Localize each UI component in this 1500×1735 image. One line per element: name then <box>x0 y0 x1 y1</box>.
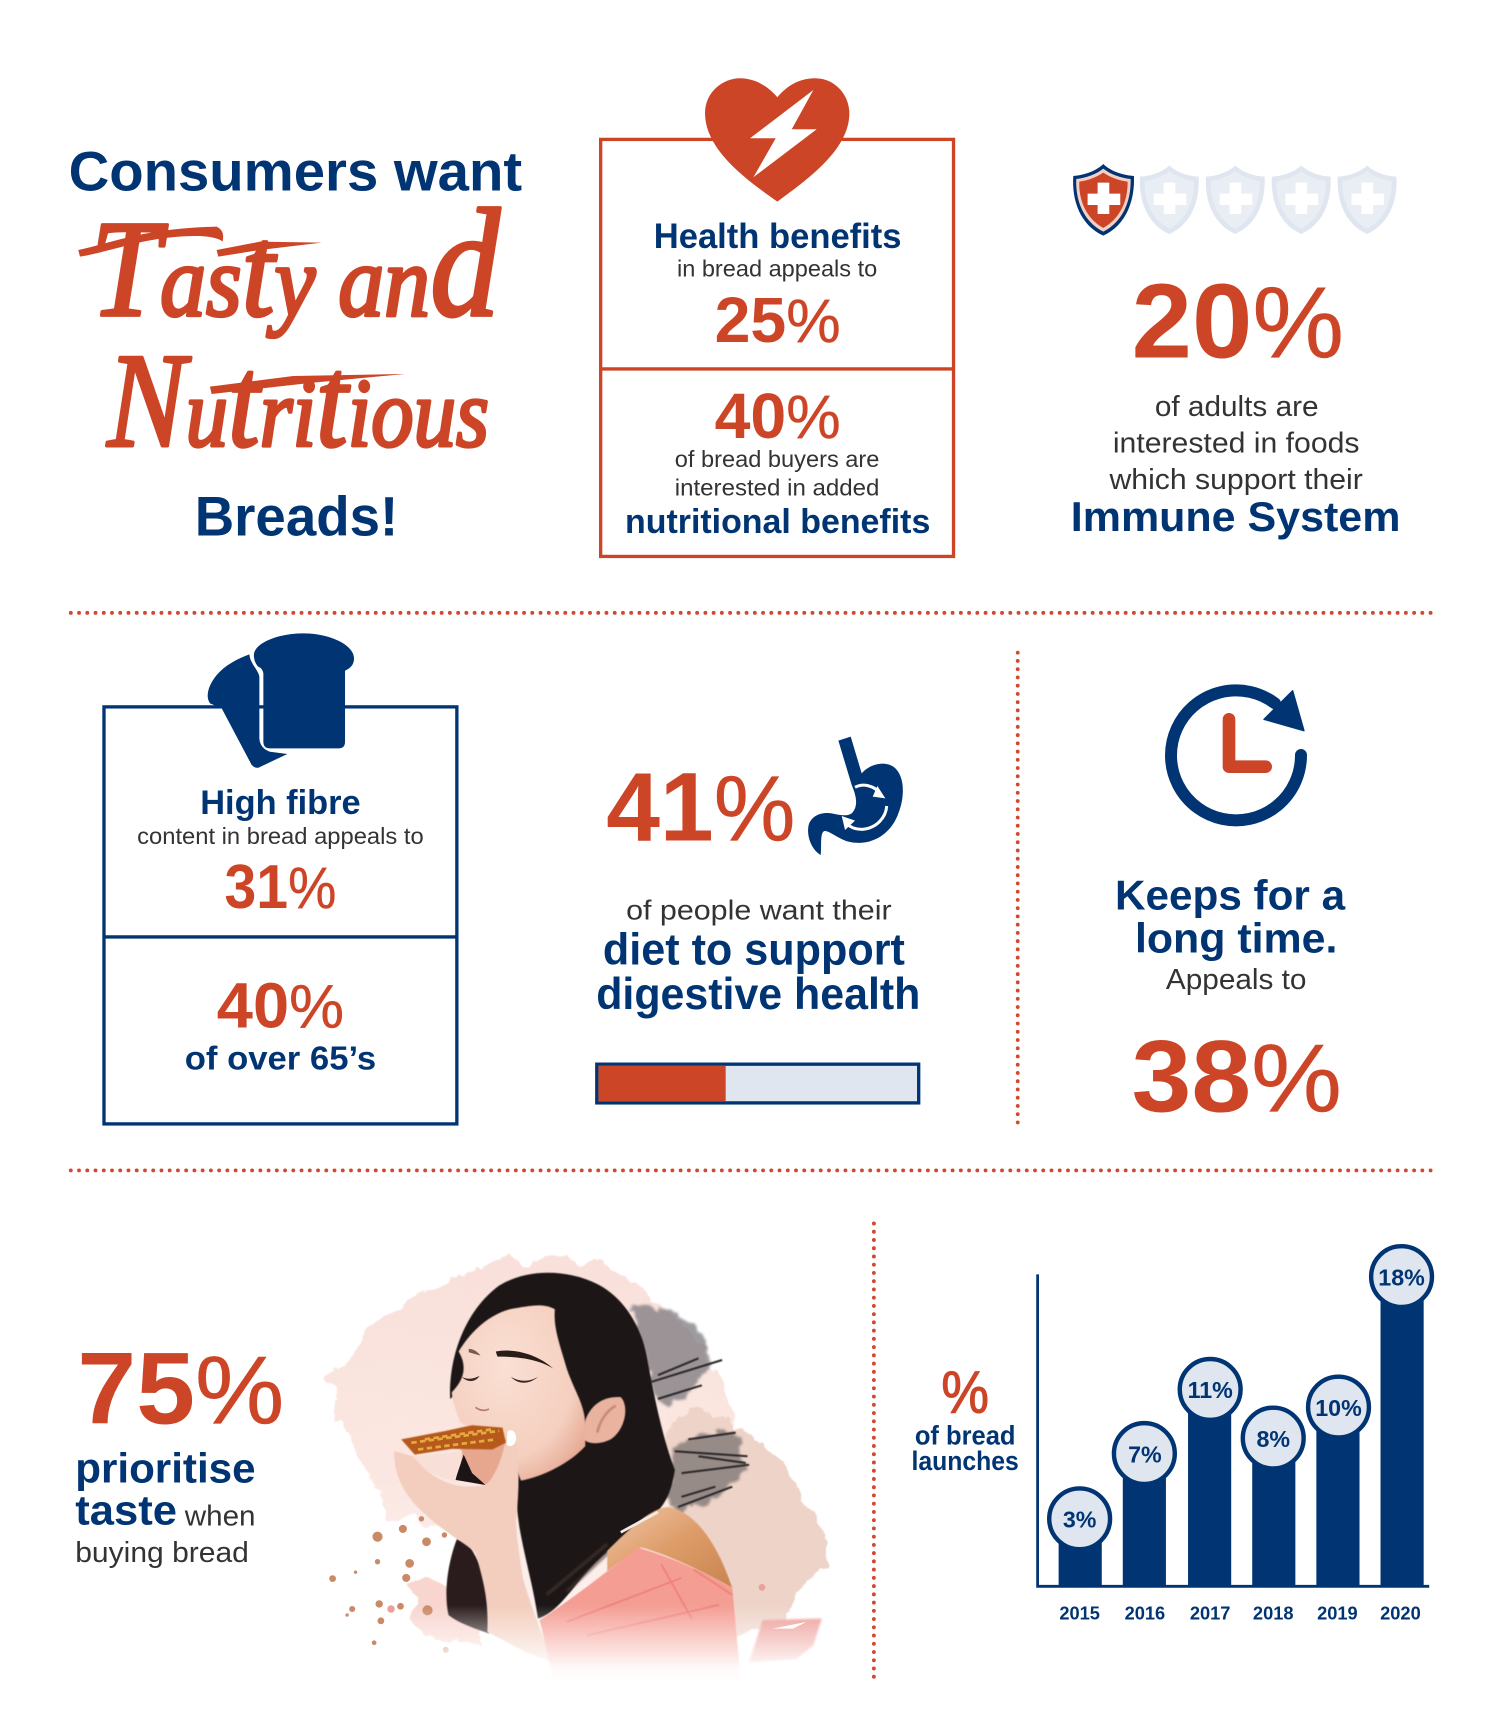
script heading: tasty and: Tasty and <box>91 178 501 349</box>
text: of over 65s: of over 65’s <box>185 1041 376 1078</box>
stat: 40% over 65: 40% <box>217 970 344 1042</box>
stat: 75%: 75% <box>77 1332 284 1446</box>
stat: 41%: 41% <box>606 753 795 862</box>
text: diet to support: diet to support <box>603 926 905 975</box>
text: interested in added: interested in added <box>675 475 879 501</box>
value labels: 7% <box>1128 1441 1162 1467</box>
script heading: nutritious: Nutritious <box>106 327 489 476</box>
value labels: 8% <box>1256 1426 1290 1452</box>
icon: stomach <box>808 737 903 855</box>
icon: clock <box>1171 690 1304 820</box>
icon row: shields <box>1073 164 1397 236</box>
heading: consumers want: Consumers want <box>69 140 522 202</box>
text: health benefits: Health benefits <box>654 217 902 256</box>
stat: 20%: 20% <box>1132 261 1344 380</box>
panel: immune system <box>1071 164 1400 540</box>
year labels: 2019 <box>1317 1602 1358 1623</box>
text: appeals to: Appeals to <box>1166 964 1306 996</box>
text: of bread buyers: of bread buyers are <box>675 446 879 472</box>
text: buying bread: buying bread <box>75 1537 249 1569</box>
text: interested in foods: interested in foods <box>1113 427 1360 459</box>
year labels <box>1059 1602 1421 1623</box>
text: long time: long time. <box>1135 914 1337 961</box>
value labels <box>1063 1264 1425 1533</box>
bar chart: bread launches 2015-2020 <box>1038 1246 1432 1623</box>
panel: health benefits <box>601 78 954 556</box>
panel: taste <box>75 1332 284 1569</box>
value labels: 11% <box>1188 1377 1233 1403</box>
value labels: 3% <box>1063 1507 1097 1533</box>
text: taste: taste <box>75 1486 177 1533</box>
label: percent of bread launches: of bread <box>915 1421 1015 1451</box>
stat: 38%: 38% <box>1132 1020 1342 1134</box>
text: immune system: Immune System <box>1071 493 1400 540</box>
value bubbles <box>1049 1246 1432 1549</box>
year labels: 2017 <box>1190 1602 1230 1623</box>
year labels: 2016 <box>1125 1602 1165 1623</box>
title <box>69 140 522 547</box>
value labels: 18% <box>1378 1264 1425 1290</box>
text: in bread appeals to: in bread appeals to <box>677 256 877 282</box>
text: when: when <box>184 1500 256 1532</box>
year labels: 2015 <box>1059 1602 1100 1623</box>
text: content in bread: content in bread appeals to <box>137 823 424 849</box>
label: percent of bread launches: % <box>941 1359 989 1426</box>
label: percent of bread launches <box>912 1359 1019 1476</box>
text: digestive health: digestive health <box>596 970 920 1019</box>
stat: 40%: 40% <box>715 380 841 452</box>
text: prioritise: prioritise <box>75 1444 256 1491</box>
text: keeps for a: Keeps for a <box>1115 871 1346 918</box>
illustration: woman eating toast <box>327 1259 837 1689</box>
stat: 31%: 31% <box>225 853 336 922</box>
panel: digestive health <box>596 737 920 1103</box>
year labels: 2018 <box>1253 1602 1294 1623</box>
bars <box>1059 1277 1424 1586</box>
text: which support their: which support their <box>1108 464 1363 496</box>
text: nutritional benefits: nutritional benefits <box>625 503 930 541</box>
value labels: 10% <box>1315 1395 1362 1421</box>
icon: bread slices <box>208 633 354 768</box>
heading: breads: Breads! <box>195 485 398 547</box>
panel: keeps for a long time <box>1115 690 1346 1134</box>
text: of adults are: of adults are <box>1155 391 1319 423</box>
panel: high fibre <box>104 633 457 1124</box>
stat: 25%: 25% <box>715 284 841 356</box>
icon: heart with bolt <box>705 78 849 202</box>
progress bar <box>597 1064 919 1103</box>
year labels: 2020 <box>1380 1602 1421 1623</box>
text: of people want: of people want their <box>626 894 892 925</box>
text: high fibre: High fibre <box>200 784 361 822</box>
label: percent of bread launches: launches <box>912 1446 1019 1476</box>
